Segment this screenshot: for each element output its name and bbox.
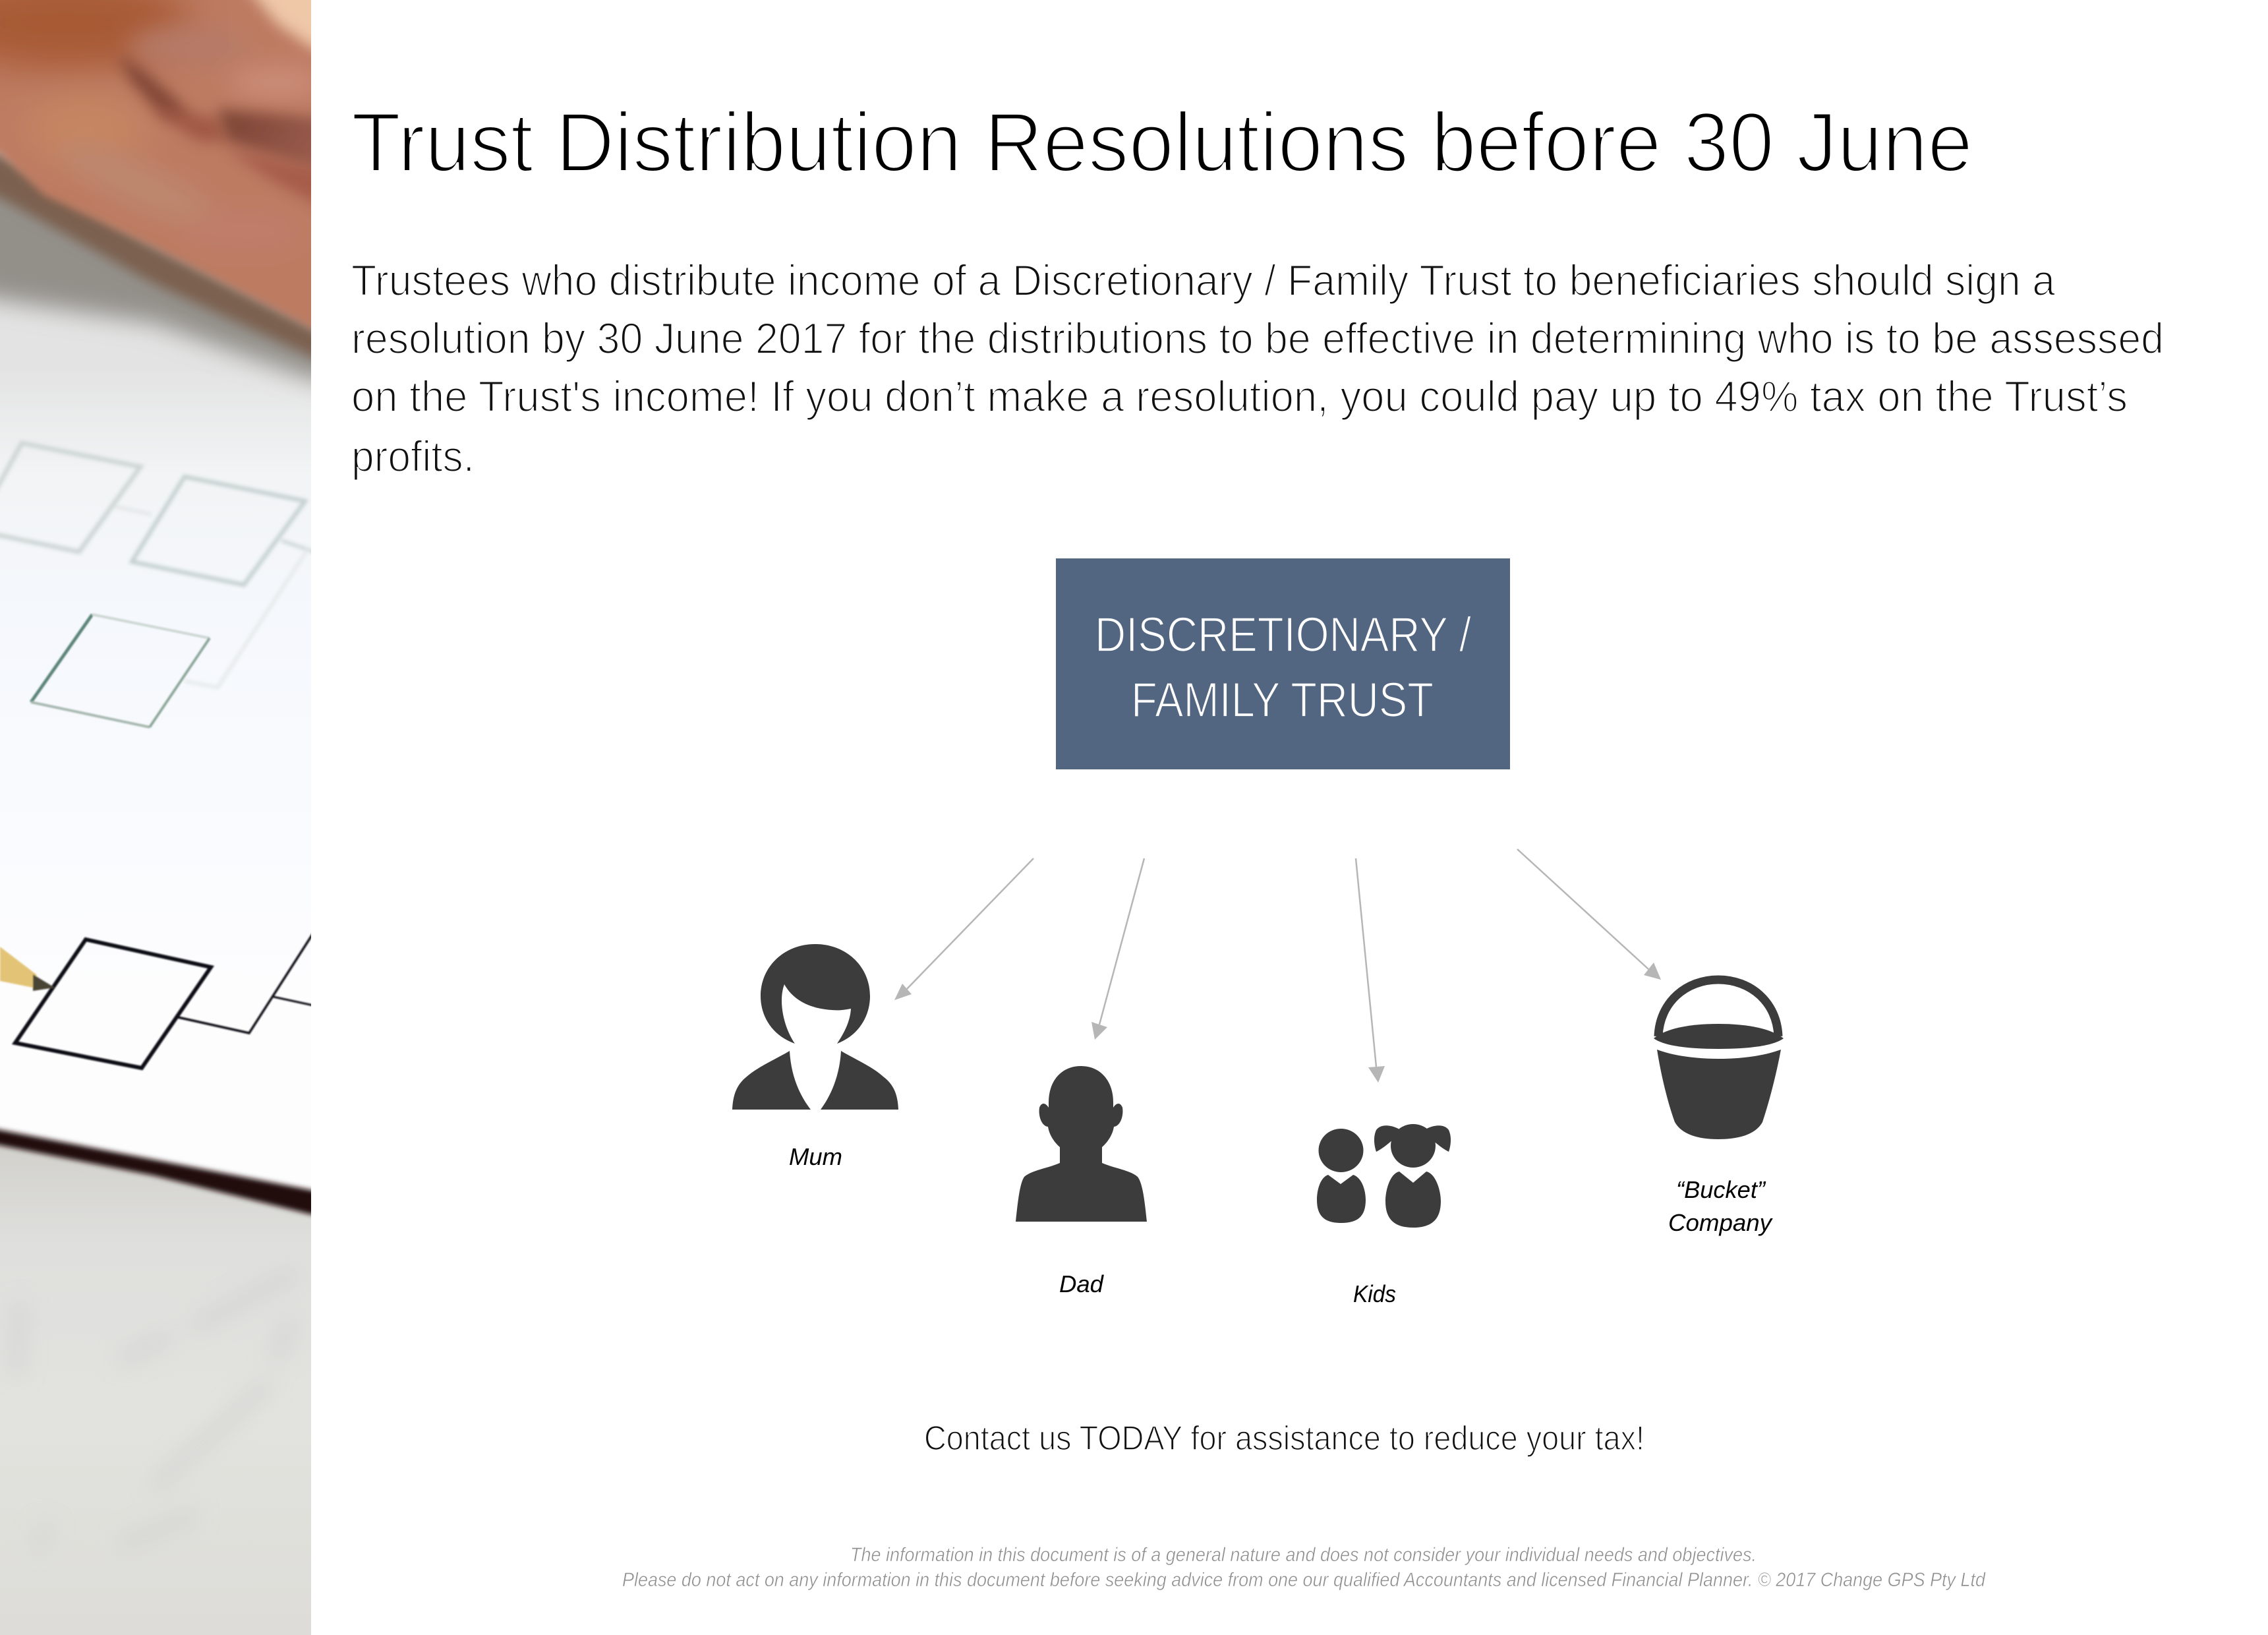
intro paragraph: Trustees who distribute income of a Discretionary / Family Trust to beneficiaries should sign a xyxy=(351,256,2055,305)
label: dad: Dad xyxy=(1059,1270,1104,1297)
panel: discretionary family trust box xyxy=(1056,558,1510,769)
label: kids: Kids xyxy=(1353,1280,1396,1307)
intro paragraph: on the Trust's income! If you don’t make a resolution, you could pay up to 49% tax on the Trust’s xyxy=(351,372,2128,421)
intro paragraph xyxy=(351,256,2164,481)
disclaimer footer xyxy=(622,1544,1986,1591)
icon: mum xyxy=(732,944,898,1110)
arrow: trust to mum xyxy=(894,858,1033,1000)
panel: discretionary family trust box: FAMILY TRUST xyxy=(1131,672,1434,727)
arrow: trust to kids xyxy=(1356,858,1385,1083)
label: bucket company xyxy=(1668,1176,1773,1236)
title: Trust Distribution Resolutions before 30 June xyxy=(351,96,1973,190)
icon: kids xyxy=(1317,1124,1451,1228)
panel: left photo of hand and flowchart paper xyxy=(0,0,311,1635)
intro paragraph: profits. xyxy=(351,432,475,481)
label: mum: Mum xyxy=(789,1143,842,1170)
disclaimer footer: Please do not act on any information in this document before seeking advice from one our qualified Accountants and licensed Financial Planner. © 2017 Change GPS Pty Ltd xyxy=(622,1569,1986,1591)
icon: bucket xyxy=(1654,980,1784,1139)
call to action: Contact us TODAY for assistance to reduce your tax! xyxy=(924,1419,1644,1458)
arrow: trust to dad xyxy=(1091,858,1144,1040)
panel: discretionary family trust box: DISCRETIONARY / xyxy=(1095,607,1471,662)
label: bucket company: “Bucket” xyxy=(1676,1176,1766,1203)
label: bucket company: Company xyxy=(1668,1209,1773,1236)
intro paragraph: resolution by 30 June 2017 for the distributions to be effective in determining who is to be assessed xyxy=(351,314,2164,363)
disclaimer footer: The information in this document is of a general nature and does not consider your individual needs and objectives. xyxy=(850,1544,1757,1566)
icon: dad xyxy=(1016,1066,1147,1222)
arrow: trust to bucket company xyxy=(1517,849,1661,980)
